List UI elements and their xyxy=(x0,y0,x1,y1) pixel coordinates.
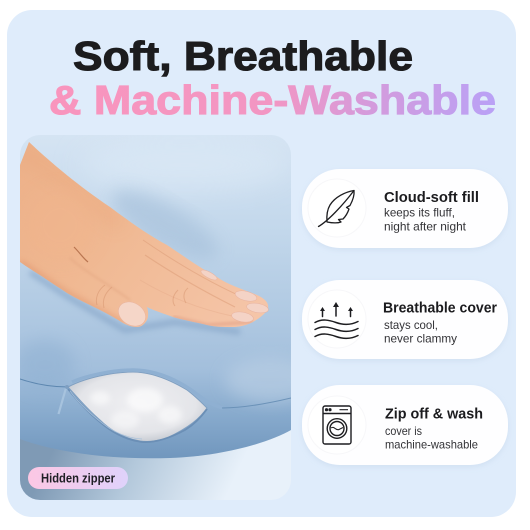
label pill: Hidden zipper xyxy=(28,467,128,489)
icon: washing machine xyxy=(323,406,351,444)
zipper opening with white fill xyxy=(68,370,223,442)
card description: cover is xyxy=(385,424,422,438)
card: Zip off & wash xyxy=(302,385,508,465)
pillow seam and zipper pull xyxy=(20,379,291,414)
icon: feather xyxy=(318,190,354,226)
hand contact shadow xyxy=(30,272,240,332)
card description: keeps its fluff, xyxy=(384,206,455,220)
floor shadow xyxy=(20,430,291,500)
card description: machine-washable xyxy=(385,438,478,452)
fingernails xyxy=(118,270,269,326)
card title: Cloud-soft fill xyxy=(384,190,479,206)
card description: never clammy xyxy=(384,332,457,346)
card title: Breathable cover xyxy=(383,300,497,316)
card description: night after night xyxy=(384,220,467,234)
title line: Soft, Breathable: Soft, Breathable xyxy=(73,33,413,79)
hand xyxy=(20,142,269,331)
card: Cloud-soft fill xyxy=(302,169,508,248)
icon: arrows over waves xyxy=(315,302,358,338)
title xyxy=(49,33,496,123)
pillow body xyxy=(20,135,291,458)
card description: stays cool, xyxy=(384,318,438,332)
card: Breathable cover xyxy=(302,280,508,359)
panel: product photo of hand pressing pillow xyxy=(15,135,315,500)
card title: Zip off & wash xyxy=(385,406,483,422)
title line: & Machine-Washable: & Machine-Washable xyxy=(49,77,496,123)
label pill: Hidden zipper: Hidden zipper xyxy=(41,472,115,486)
